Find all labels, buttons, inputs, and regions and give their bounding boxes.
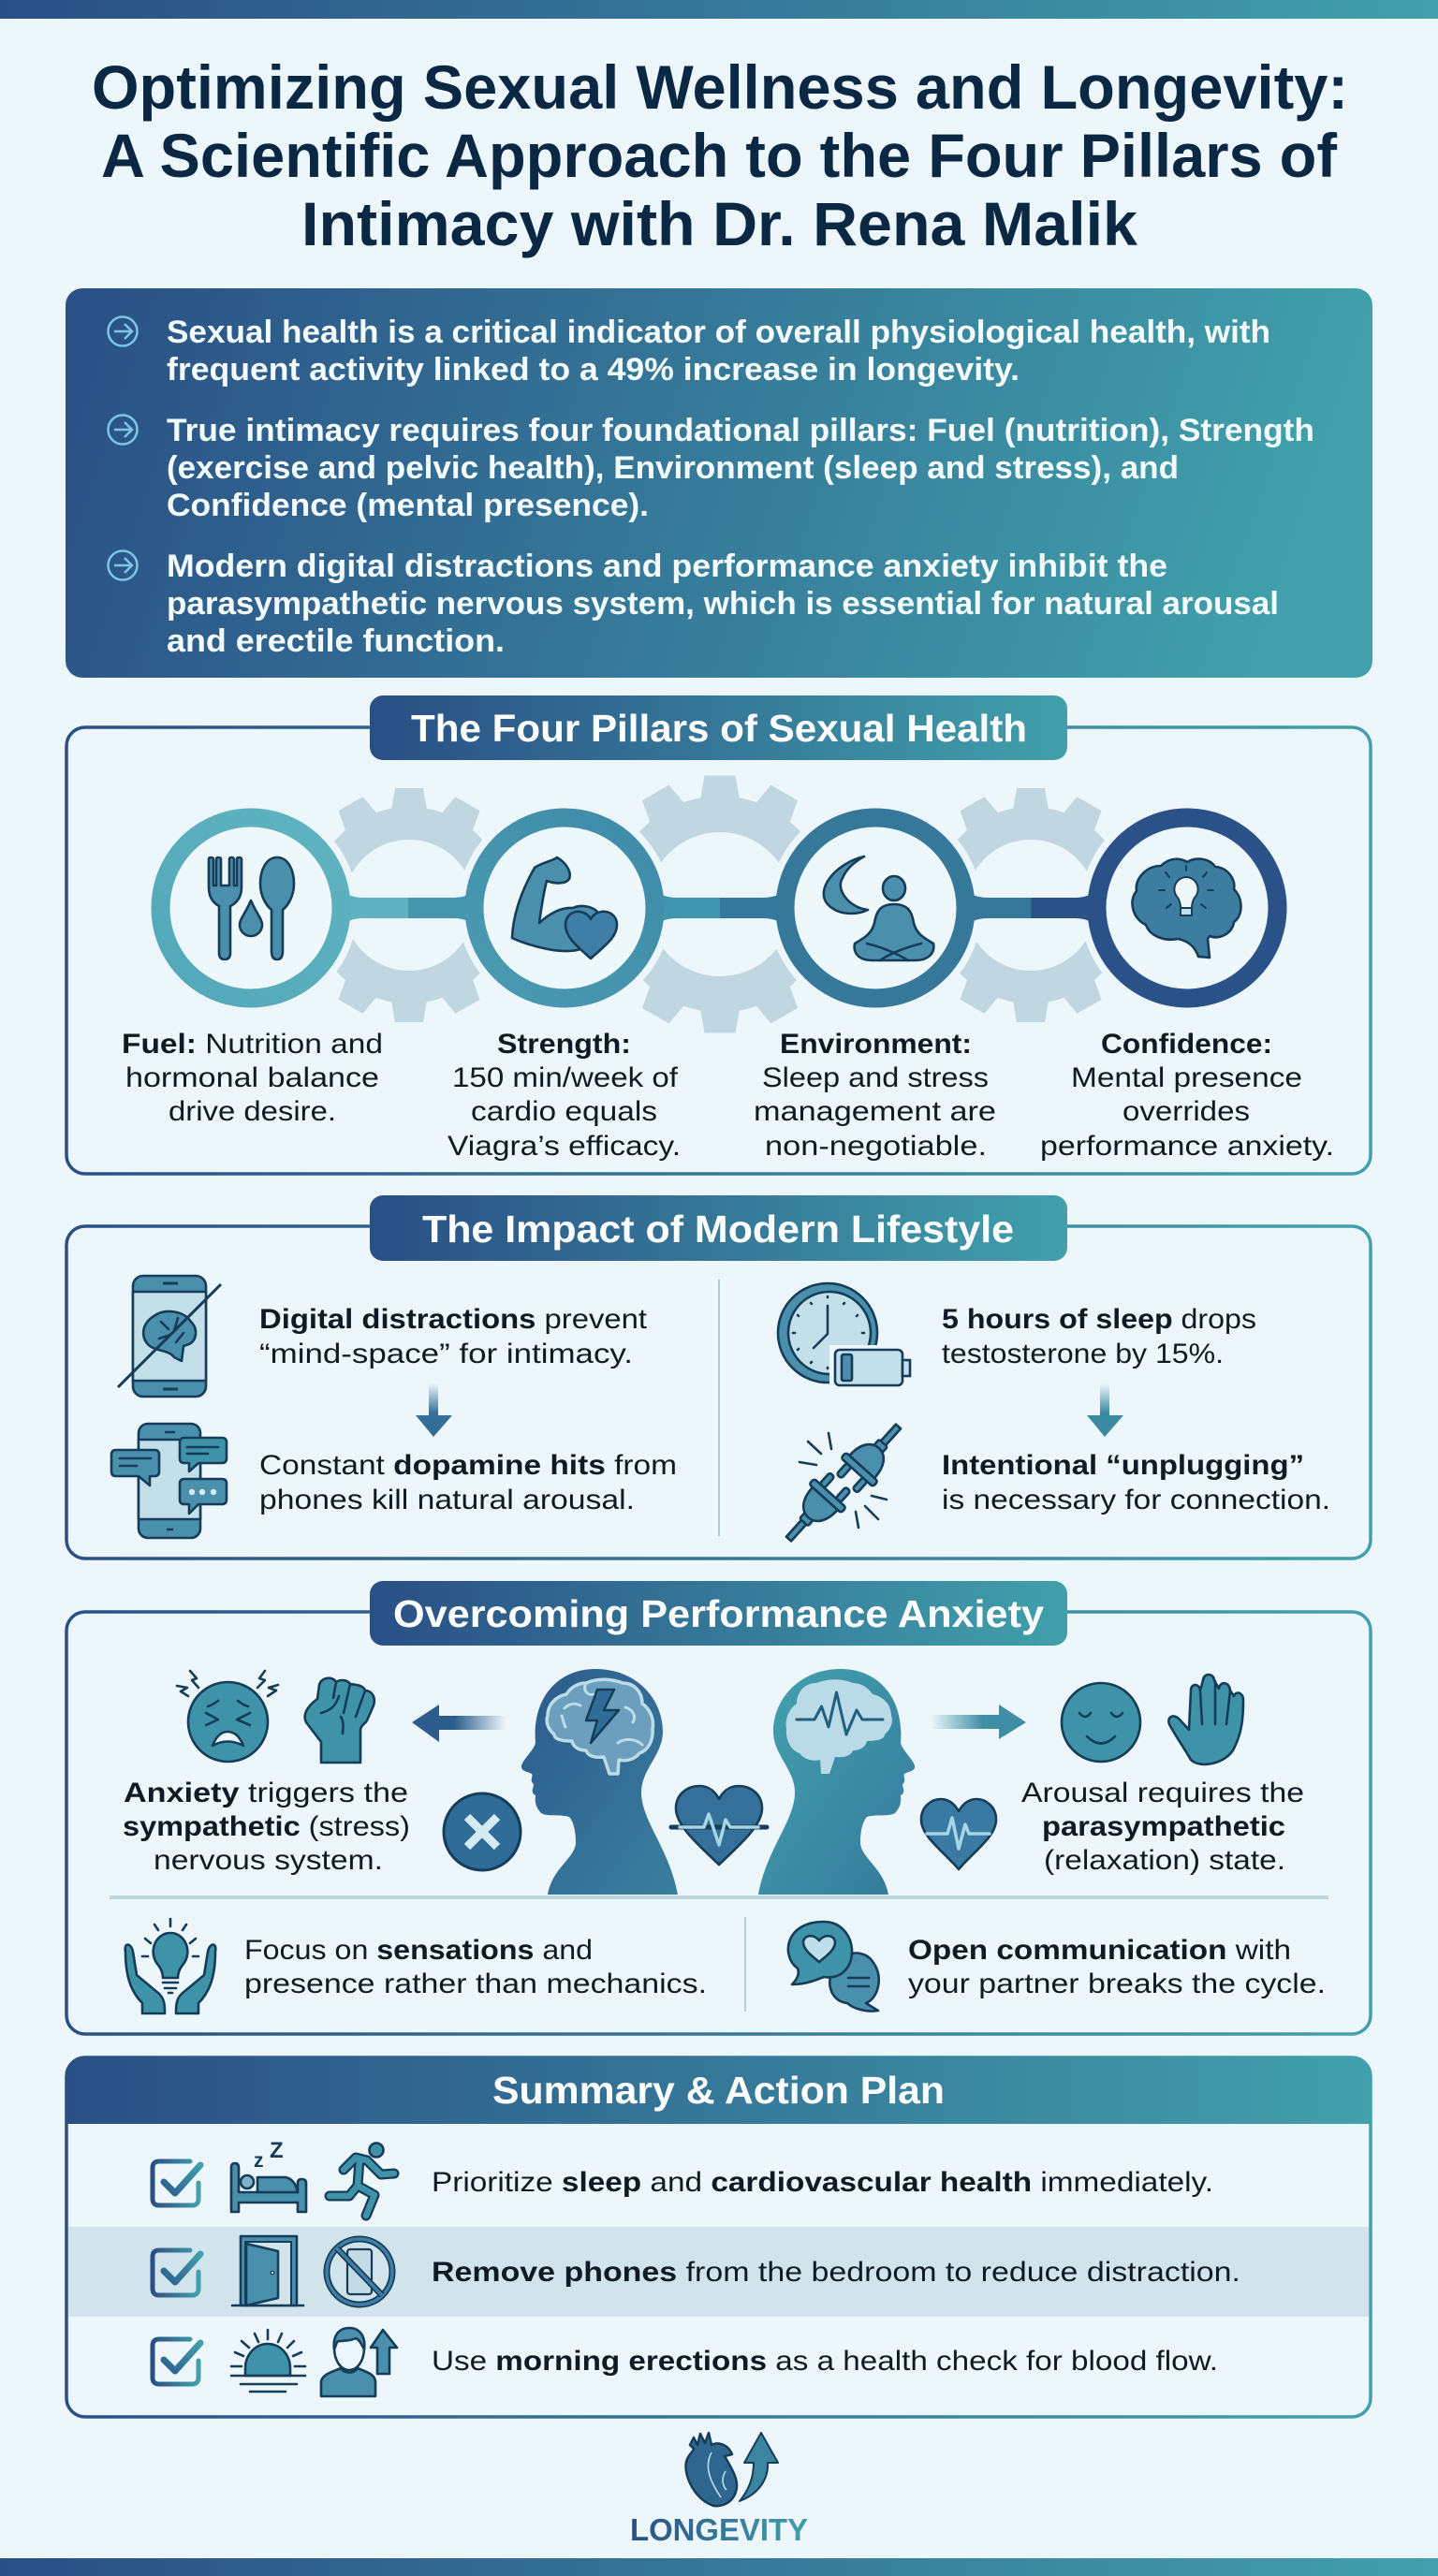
icon: open door (232, 2236, 303, 2305)
text: open communication: your partner breaks the cycle. (908, 1969, 1326, 1999)
icon: clock and low battery (778, 1283, 910, 1390)
heading: anxiety (370, 1581, 1067, 1646)
icon: open hand (1168, 1675, 1243, 1764)
text: morning erections: Use morning erections as a health check for blood flow. (432, 2346, 1218, 2377)
title: A Scientific Approach to the Four Pillars of (101, 121, 1338, 190)
heading: four pillars: The Four Pillars of Sexual Health (411, 707, 1027, 750)
text: five hours of sleep: 5 hours of sleep drops (942, 1304, 1256, 1335)
row 2 band (68, 2227, 1369, 2317)
gear left (299, 788, 520, 1022)
icon: bed with zzz: z (254, 2150, 264, 2172)
icon: runner (330, 2144, 394, 2216)
bullet 2: Confidence (mental presence). (167, 488, 649, 523)
icon: unplugged cord (772, 1412, 915, 1553)
text: digital distractions: Digital distractions prevent (259, 1304, 648, 1335)
checkbox 2 (153, 2250, 200, 2295)
bullet 1: Sexual health is a critical indicator of overall physiological health, with (167, 315, 1270, 350)
pillar text: confidence: Mental presence (1071, 1062, 1302, 1093)
pillar text: environment: Environment: (780, 1029, 972, 1060)
arrow: down right (1087, 1383, 1123, 1437)
text: digital distractions: “mind-space” for intimacy. (259, 1339, 633, 1369)
text: arousal requires: Arousal requires the (1021, 1778, 1304, 1808)
pillar text: fuel: Fuel: Nutrition and (122, 1029, 383, 1060)
pillar text: strength: cardio equals (471, 1096, 657, 1127)
pillar text: fuel (122, 1029, 383, 1127)
text: prioritize sleep: Prioritize sleep and cardiovascular health immediately. (432, 2167, 1213, 2198)
bullet 3: parasympathetic nervous system, which is essential for natural arousal (167, 586, 1279, 622)
icon: phone with chat bubbles (111, 1424, 232, 1538)
text: five hours of sleep: testosterone by 15%. (942, 1339, 1224, 1369)
pillar text: fuel: drive desire. (169, 1096, 336, 1127)
text: dopamine hits: Constant dopamine hits from (259, 1450, 677, 1481)
icon: x circle (444, 1793, 521, 1870)
pillar text: strength (448, 1029, 681, 1162)
icon: flexed arm and heart (512, 857, 617, 959)
icon: person with up arrow (321, 2328, 397, 2396)
text: anxiety triggers: Anxiety triggers the (124, 1778, 408, 1808)
icon: anatomical heart (686, 2433, 737, 2506)
bottom plug (772, 1468, 856, 1553)
panel: key takeaways (66, 288, 1372, 678)
text: dopamine hits: phones kill natural arousal. (259, 1485, 635, 1515)
summary header (66, 2057, 1371, 2124)
text: intentional unplugging (942, 1450, 1330, 1515)
text: focus on sensations: presence rather than mechanics. (244, 1969, 707, 1999)
gear right (920, 788, 1141, 1022)
icon: hands holding bulb (125, 1919, 215, 2013)
text: focus on sensations (244, 1935, 707, 1999)
pillar ring: confidence (1097, 818, 1277, 998)
bullet 2 (109, 413, 1314, 523)
icon: up arrow (740, 2433, 778, 2501)
text: remove phones: Remove phones from the bedroom to reduce distraction. (432, 2257, 1240, 2288)
pillar text: confidence: Confidence: (1101, 1029, 1272, 1060)
summary header: Summary & Action Plan (492, 2069, 945, 2112)
icon: heart with pulse, right (921, 1799, 996, 1869)
title: Optimizing Sexual Wellness and Longevity: (92, 52, 1348, 122)
connector 1 (339, 885, 477, 931)
icon: no phone (327, 2239, 392, 2305)
text: open communication (908, 1935, 1326, 1999)
gear middle (598, 775, 842, 1033)
arrow: down left (416, 1383, 452, 1437)
icon: phone with crossed brain (118, 1276, 221, 1397)
heading: impact (370, 1195, 1067, 1261)
bullet 1: frequent activity linked to a 49% increase in longevity. (167, 352, 1020, 388)
arrow: left (412, 1705, 506, 1742)
text: anxiety triggers: sympathetic (stress) (123, 1811, 410, 1842)
text: arousal requires: parasympathetic (1042, 1811, 1285, 1842)
text: five hours of sleep (942, 1304, 1256, 1369)
icon: sunrise (231, 2330, 305, 2392)
checkbox 3 (153, 2339, 200, 2384)
bullet 3 (109, 549, 1279, 659)
arrow: right (931, 1705, 1026, 1739)
panel: impact of modern lifestyle (66, 1195, 1371, 1559)
pillar text: environment (754, 1029, 996, 1162)
icon: stressed face (177, 1671, 278, 1762)
icon: chat bubbles with heart (788, 1922, 879, 2012)
text: digital distractions (259, 1304, 648, 1369)
text: dopamine hits (259, 1450, 677, 1515)
pillar text: confidence: overrides (1123, 1096, 1250, 1127)
text: arousal requires: (relaxation) state. (1044, 1845, 1285, 1876)
icon: clenched fist (305, 1678, 374, 1763)
pillar text: strength: 150 min/week of (452, 1062, 679, 1093)
pillar text: strength: Viagra’s efficacy. (448, 1131, 681, 1162)
bullet 3: and erectile function. (167, 623, 505, 659)
heading: impact: The Impact of Modern Lifestyle (422, 1208, 1014, 1251)
pillar text: confidence (1040, 1029, 1334, 1162)
icon: brain and light bulb (1132, 859, 1241, 958)
heading: four pillars (370, 695, 1067, 760)
text: anxiety triggers (123, 1778, 410, 1876)
text: focus on sensations: Focus on sensations and (244, 1935, 593, 1966)
pillar text: environment: Sleep and stress (762, 1062, 989, 1093)
text: intentional unplugging: is necessary for connection. (942, 1485, 1330, 1515)
top plug (831, 1412, 915, 1498)
icon: calm face (1062, 1683, 1140, 1762)
pillar ring: fuel (161, 818, 341, 998)
heading: anxiety: Overcoming Performance Anxiety (393, 1592, 1044, 1635)
checkbox 1 (153, 2161, 200, 2205)
bottom bar (0, 2558, 1438, 2576)
panel: the four pillars (66, 695, 1371, 1174)
icon: heart with pulse, left (671, 1786, 767, 1865)
ring halos (144, 801, 1294, 1015)
text: arousal requires (1021, 1778, 1304, 1876)
bullet 2: (exercise and pelvic health), Environment (sleep and stress), and (167, 450, 1179, 486)
text: open communication: Open communication with (908, 1935, 1291, 1966)
panel: summary and action plan (66, 2057, 1371, 2417)
pillar text: environment: non-negotiable. (765, 1131, 987, 1162)
bullet 1 (109, 315, 1270, 388)
top bar (0, 0, 1438, 19)
pillar ring: strength (474, 818, 655, 998)
icon: bed with zzz: Z (270, 2138, 284, 2163)
connector 2 (653, 885, 787, 931)
figure: stressed head silhouette (521, 1669, 678, 1895)
pillar text: fuel: hormonal balance (125, 1062, 379, 1093)
panel: overcoming performance anxiety (66, 1581, 1371, 2034)
figure: calm head silhouette (758, 1669, 915, 1895)
icon: bed with zzz (231, 2138, 306, 2212)
title (92, 52, 1348, 258)
connector 3 (963, 885, 1099, 931)
text: intentional unplugging: Intentional “unplugging” (942, 1450, 1304, 1481)
icon: fork spoon and drop (209, 857, 294, 959)
text: anxiety triggers: nervous system. (154, 1845, 383, 1876)
pillar text: environment: management are (754, 1096, 996, 1127)
label: longevity: LONGEVITY (630, 2512, 808, 2547)
bullet 3: Modern digital distractions and performance anxiety inhibit the (167, 549, 1167, 584)
footer logo (630, 2433, 808, 2547)
pillar ring: environment (785, 818, 966, 998)
pillar text: strength: Strength: (497, 1029, 631, 1060)
bullet 2: True intimacy requires four foundational pillars: Fuel (nutrition), Strength (167, 413, 1314, 448)
icon: moon and meditation (824, 856, 933, 960)
pillar text: confidence: performance anxiety. (1040, 1131, 1334, 1162)
title: Intimacy with Dr. Rena Malik (301, 189, 1137, 258)
